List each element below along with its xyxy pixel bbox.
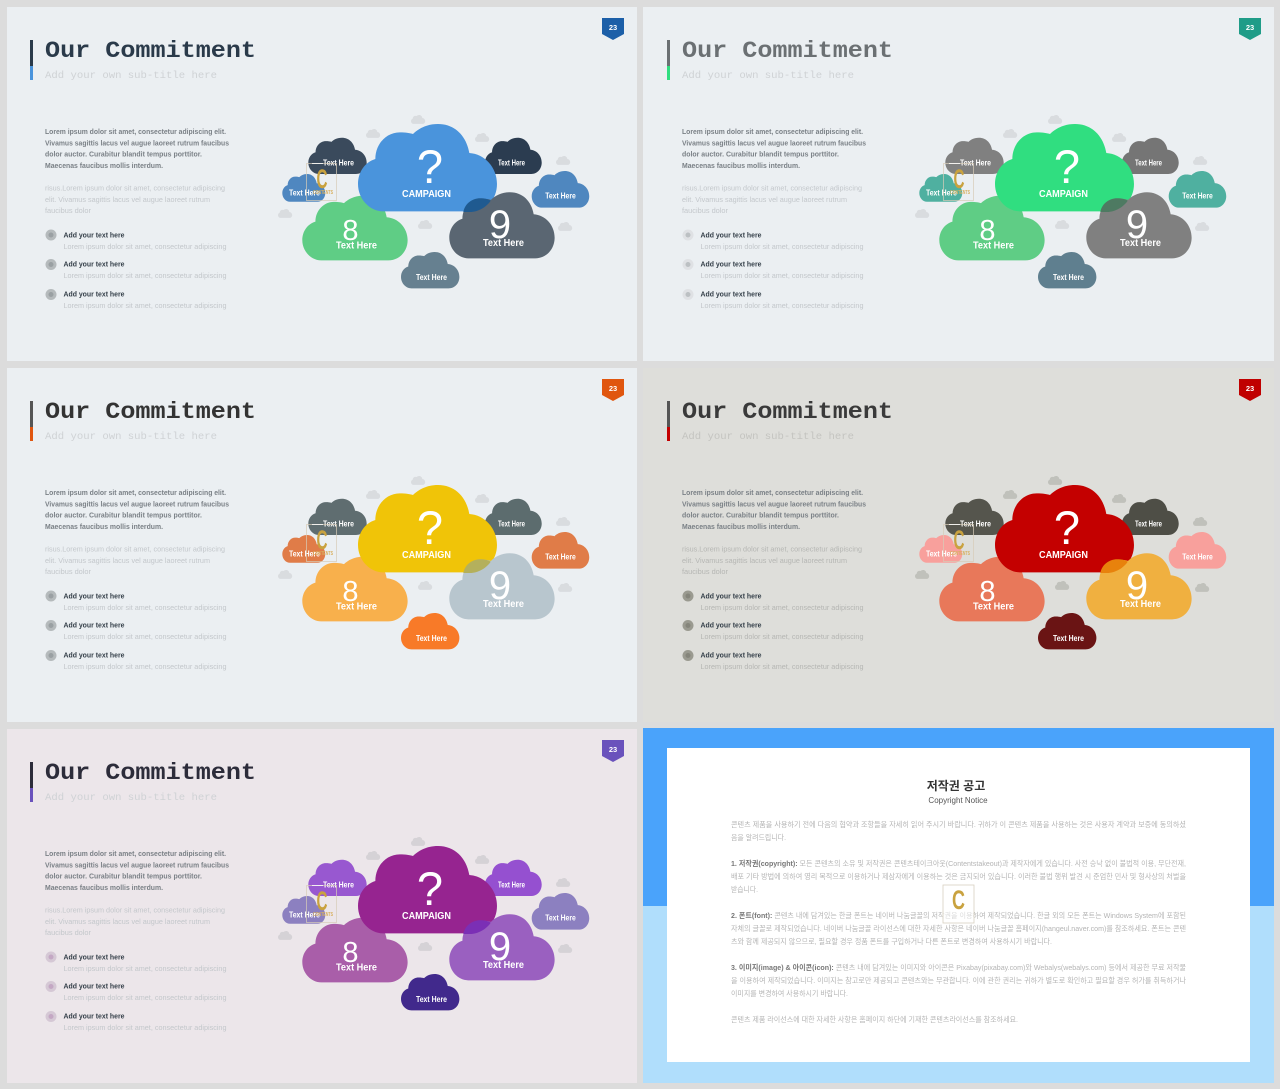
cloud: 9: 9 (489, 203, 511, 247)
bold paragraph: Vivamus sagittis lacus vel augue laoreet rutrum faucibus (45, 499, 229, 508)
cloud: left small: Text Here (926, 550, 957, 559)
cloud: 8 (302, 196, 408, 260)
bullet list: Lorem ipsum dolor sit amet, consectetur adipiscing (700, 301, 864, 310)
bullet list: Add your text here (64, 620, 124, 630)
cloud: 9 (1086, 192, 1192, 258)
cloud: left small: Text Here (926, 189, 957, 198)
watermark: CONTENTS (313, 190, 333, 196)
bullet list: Add your text here (700, 260, 762, 268)
subtitle: Add your own sub-title here (682, 70, 854, 82)
watermark: C (954, 164, 964, 194)
cloud diagram (278, 837, 589, 1010)
title: Our Commitment (45, 760, 256, 786)
subtitle: Add your own sub-title here (45, 431, 217, 443)
cloud diagram (915, 115, 1226, 288)
bullet list (46, 590, 226, 671)
bold paragraph: dolor auctor. Curabitur blandit tempus porttitor. (45, 872, 202, 881)
bold paragraph (682, 127, 866, 170)
cloud: top left (308, 138, 367, 174)
bullet list: Lorem ipsum dolor sit amet, consectetur adipiscing (700, 242, 864, 251)
cloud: top right: Text Here (498, 159, 525, 168)
bold paragraph: Maecenas faucibus mollis interdum. (682, 161, 800, 170)
cloud: bottom (1038, 613, 1096, 649)
watermark (306, 524, 336, 562)
bullet list: Add your text here (700, 290, 762, 298)
cloud: right (532, 893, 589, 930)
cloud diagram (278, 476, 589, 649)
bold paragraph: dolor auctor. Curabitur blandit tempus porttitor. (682, 150, 839, 159)
cloud: 8 (939, 557, 1045, 621)
cloud: campaign: CAMPAIGN (402, 911, 451, 922)
bold paragraph: Lorem ipsum dolor sit amet, consectetur adipiscing elit. (45, 849, 226, 858)
cloud: left small: Text Here (289, 911, 320, 920)
cloud: campaign (995, 485, 1134, 572)
cloud: bottom (1038, 252, 1096, 288)
page badge (602, 740, 624, 762)
cloud: campaign: ? (417, 862, 443, 915)
cloud: bottom: Text Here (416, 634, 447, 643)
cloud: bottom (401, 613, 459, 649)
bold paragraph: Maecenas faucibus mollis interdum. (45, 522, 163, 531)
cloud: 8: 8 (342, 937, 359, 969)
watermark: CONTENTS (313, 912, 333, 918)
cloud: campaign (358, 846, 497, 933)
cloud: bottom: Text Here (1053, 634, 1084, 643)
cloud: campaign (358, 485, 497, 572)
cloud: top right: Text Here (1135, 520, 1162, 529)
cloud: right: Text Here (545, 914, 576, 923)
cloud: top left: Text Here (960, 159, 991, 168)
notice section 3 (731, 962, 1186, 998)
gray paragraph (45, 906, 225, 937)
watermark: C (316, 525, 328, 555)
cloud: right (532, 532, 589, 569)
bold paragraph: Maecenas faucibus mollis interdum. (682, 522, 800, 531)
bullet list: Add your text here (700, 230, 762, 240)
bold paragraph: Lorem ipsum dolor sit amet, consectetur adipiscing elit. (682, 488, 863, 497)
notice section 1 (731, 858, 1186, 894)
bullet list: Lorem ipsum dolor sit amet, consectetur adipiscing (700, 603, 864, 612)
cloud: 9: Text Here (483, 237, 524, 249)
page badge: 23 (609, 745, 617, 754)
watermark: CONTENTS (950, 551, 970, 557)
notice section 2: 자체의 글꼴로 제작되었습니다. 네이버 나눔글꼴 라이선스에 대한 자세한 사항은 네이버 나눔글꼴 홈페이지(hangeul.naver.com)를 참조하세요. 폰트는 콘텐 (731, 923, 1186, 933)
notice section 3: 이미지를 변경하여 사용하시기 바랍니다. (731, 988, 848, 998)
cloud: left small (919, 174, 962, 202)
notice closing line: 콘텐츠 제품 라이선스에 대한 자세한 사항은 홈페이지 하단에 기재한 콘텐츠라이선스를 참조하세요. (731, 1014, 1018, 1024)
notice section 1: 1. 저작권(copyright): 모든 콘텐츠의 소유 및 저작권은 콘텐츠테이크아웃(Contentstakeout)과 제작자에게 있습니다. 사전 승낙 없이 불법적 이용, 무단전재, (731, 858, 1186, 868)
bold paragraph: dolor auctor. Curabitur blandit tempus porttitor. (45, 511, 202, 520)
cloud: 8: Text Here (336, 240, 377, 252)
gray paragraph (45, 544, 225, 576)
cloud: 9 (449, 192, 555, 258)
gray paragraph: risus.Lorem ipsum dolor sit amet, consectetur adipiscing (45, 544, 225, 554)
cloud: top right (1122, 499, 1179, 535)
page badge (1239, 18, 1261, 40)
gray paragraph: elit. Vivamus sagittis lacus vel augue laoreet rutrum (45, 195, 210, 204)
page badge: 23 (1246, 384, 1254, 393)
notice section 3: 3. 이미지(image) & 아이콘(icon): 콘텐츠 내에 담겨있는 이미지와 아이콘은 Pixabay(pixabay.com)와 Webalys(webalys.com) 등에서 제공한 무료 저작물 (731, 962, 1186, 972)
gray paragraph: elit. Vivamus sagittis lacus vel augue laoreet rutrum (682, 556, 847, 565)
cloud: top left: Text Here (960, 520, 991, 529)
gray paragraph: faucibus dolor (682, 567, 729, 576)
cloud: top right (1122, 138, 1179, 174)
bullet list: Lorem ipsum dolor sit amet, consectetur adipiscing (700, 662, 864, 671)
gray paragraph: faucibus dolor (45, 206, 92, 215)
watermark: CONTENTS (313, 551, 333, 557)
cloud: left small (919, 535, 962, 563)
title: Our Commitment (45, 38, 256, 64)
bullet list: Lorem ipsum dolor sit amet, consectetur adipiscing (64, 964, 226, 973)
gray paragraph: risus.Lorem ipsum dolor sit amet, consectetur adipiscing (45, 184, 225, 192)
cloud: 8 (302, 557, 408, 621)
cloud: 9: 9 (1126, 203, 1148, 247)
gray paragraph (682, 544, 862, 576)
subtitle: Add your own sub-title here (45, 70, 217, 82)
cloud: right: Text Here (545, 553, 576, 562)
bullet list: Add your text here (700, 592, 762, 600)
title accent bar (30, 762, 33, 802)
title accent bar (667, 401, 670, 441)
cloud: bottom: Text Here (416, 995, 447, 1004)
bullet list: Lorem ipsum dolor sit amet, consectetur adipiscing (64, 603, 226, 612)
cloud: campaign (995, 124, 1134, 211)
gray paragraph: risus.Lorem ipsum dolor sit amet, consectetur adipiscing (682, 544, 862, 554)
cloud: bottom: Text Here (1053, 273, 1084, 282)
cloud: top left: Text Here (323, 520, 354, 529)
cloud: campaign: CAMPAIGN (402, 189, 451, 200)
watermark: C (952, 885, 965, 915)
watermark (944, 524, 974, 562)
notice subtitle: Copyright Notice (928, 796, 988, 805)
cloud: top right: Text Here (498, 881, 525, 890)
cloud diagram (915, 476, 1226, 649)
cloud: top right (485, 499, 542, 535)
cloud: top left: Text Here (323, 881, 354, 890)
watermark (306, 164, 336, 200)
cloud: top right: Text Here (498, 520, 525, 529)
bullet list (46, 952, 226, 1032)
bullet list: Add your text here (64, 592, 124, 600)
bullet list: Lorem ipsum dolor sit amet, consectetur adipiscing (64, 632, 226, 641)
page badge (602, 379, 624, 401)
cloud: 8: 8 (342, 576, 359, 608)
cloud: 9: Text Here (1120, 598, 1161, 610)
panel: green theme (643, 7, 1274, 361)
cloud: left small: Text Here (289, 189, 320, 198)
watermark (943, 885, 974, 923)
cloud: 9: Text Here (483, 959, 524, 971)
cloud: 9 (1086, 553, 1192, 619)
gray paragraph: elit. Vivamus sagittis lacus vel augue laoreet rutrum (45, 917, 210, 926)
watermark: C (954, 525, 964, 555)
cloud: campaign: ? (417, 140, 443, 193)
bullet list: Add your text here (64, 982, 124, 990)
cloud: right (1169, 171, 1226, 208)
cloud: top left (945, 499, 1004, 535)
bold paragraph: Maecenas faucibus mollis interdum. (45, 161, 163, 170)
bullet list: Add your text here (700, 620, 762, 630)
cloud: campaign: CAMPAIGN (1039, 550, 1088, 561)
cloud: 8: 8 (979, 576, 996, 608)
cloud: 8: Text Here (973, 240, 1014, 252)
watermark (944, 164, 974, 200)
cloud: right: Text Here (1182, 553, 1213, 562)
panel: red theme (643, 368, 1274, 722)
cloud: 9: 9 (489, 925, 511, 969)
cloud: bottom (401, 252, 459, 288)
cloud: 9: Text Here (1120, 237, 1161, 249)
bold paragraph: Vivamus sagittis lacus vel augue laoreet rutrum faucibus (682, 499, 866, 508)
cloud: 8 (302, 918, 408, 982)
panel: copyright notice (643, 728, 1274, 1083)
cloud: 9 (449, 553, 555, 619)
cloud: bottom: Text Here (416, 273, 447, 282)
subtitle: Add your own sub-title here (45, 792, 217, 804)
bold paragraph: Vivamus sagittis lacus vel augue laoreet rutrum faucibus (682, 138, 866, 147)
cloud: top left (308, 499, 367, 535)
title: Our Commitment (682, 399, 893, 425)
bold paragraph (682, 488, 866, 531)
cloud: bottom (401, 974, 459, 1010)
bullet list: Add your text here (64, 290, 124, 298)
bullet list: Lorem ipsum dolor sit amet, consectetur adipiscing (64, 1023, 226, 1032)
bullet list: Lorem ipsum dolor sit amet, consectetur adipiscing (700, 271, 864, 280)
bold paragraph: Lorem ipsum dolor sit amet, consectetur adipiscing elit. (45, 127, 226, 136)
gray paragraph: faucibus dolor (45, 928, 92, 937)
gray paragraph (682, 184, 862, 215)
notice section 3: 을 이용하여 제작되었습니다. 이미지는 참고로만 제공되고 콘텐츠와는 무관합니다. 이에 관한 권리는 귀하가 별도로 확인하고 필요할 경우 허가를 취득하거나 (731, 975, 1186, 985)
bullet list: Lorem ipsum dolor sit amet, consectetur adipiscing (64, 242, 226, 251)
gray paragraph: risus.Lorem ipsum dolor sit amet, consectetur adipiscing (682, 184, 862, 192)
cloud: top left (945, 138, 1004, 174)
notice intro: 음을 알려드립니다. (731, 832, 786, 842)
panel: purple theme (7, 729, 637, 1083)
bold paragraph (45, 488, 229, 531)
notice section 2: 츠와 함께 제공되지 않으므로, 필요할 경우 정품 폰트를 구입하거나 다른 폰트로 변경하여 사용하시기 바랍니다. (731, 936, 1052, 946)
cloud: left small (282, 896, 325, 924)
cloud: top right (485, 860, 542, 896)
bullet list: Add your text here (64, 952, 124, 962)
title accent bar (667, 40, 670, 80)
gray paragraph: elit. Vivamus sagittis lacus vel augue laoreet rutrum (682, 195, 847, 204)
cloud: right: Text Here (1182, 192, 1213, 201)
cloud: 8: Text Here (336, 601, 377, 613)
bullet list: Lorem ipsum dolor sit amet, consectetur adipiscing (64, 301, 226, 310)
cloud: campaign: ? (1054, 501, 1080, 554)
title accent bar (30, 40, 33, 80)
gray paragraph: elit. Vivamus sagittis lacus vel augue laoreet rutrum (45, 556, 210, 565)
notice section 1: 배포 기타 방법에 의하여 영리 목적으로 이용하거나 제삼자에게 이용하는 것은 금지되어 있습니다. 이러한 불법 행위 발견 시 준엄한 민사 및 형사상의 처벌을 (731, 871, 1186, 881)
bold paragraph: Lorem ipsum dolor sit amet, consectetur adipiscing elit. (45, 488, 226, 497)
bullet list: Add your text here (64, 650, 124, 660)
gray paragraph: risus.Lorem ipsum dolor sit amet, consectetur adipiscing (45, 906, 225, 914)
cloud: 8: Text Here (336, 962, 377, 974)
cloud: left small (282, 174, 325, 202)
panel: blue theme (7, 7, 637, 361)
title: Our Commitment (45, 399, 256, 425)
cloud: right (532, 171, 589, 208)
cloud: left small (282, 535, 325, 563)
title: Our Commitment (682, 38, 893, 64)
bullet list: Add your text here (700, 650, 762, 660)
title accent bar (30, 401, 33, 441)
bullet list: Add your text here (64, 230, 124, 240)
page badge (1239, 379, 1261, 401)
bold paragraph: Maecenas faucibus mollis interdum. (45, 883, 163, 892)
cloud: 9 (449, 914, 555, 980)
bold paragraph (45, 127, 229, 170)
bullet list: Add your text here (64, 1012, 124, 1020)
page badge: 23 (609, 23, 617, 32)
notice section 2: 2. 폰트(font): 콘텐츠 내에 담겨있는 한글 폰트는 네이버 나눔글꼴의 저작권을 이용하여 제작되었습니다. 한글 외의 모든 폰트는 Windows System에 포함된 (731, 910, 1186, 920)
bold paragraph: dolor auctor. Curabitur blandit tempus porttitor. (45, 150, 202, 159)
notice title: 저작권 공고 (927, 778, 985, 793)
cloud: campaign (358, 124, 497, 211)
bullet list (682, 230, 864, 310)
cloud: 9: Text Here (483, 598, 524, 610)
cloud: left small: Text Here (289, 550, 320, 559)
cloud: campaign: ? (417, 501, 443, 554)
cloud: top right: Text Here (1135, 159, 1162, 168)
cloud: 8: 8 (342, 215, 359, 247)
cloud: 8 (939, 196, 1045, 260)
cloud: 8: Text Here (973, 601, 1014, 613)
cloud: top right (485, 138, 542, 174)
bullet list: Lorem ipsum dolor sit amet, consectetur adipiscing (64, 993, 226, 1002)
cloud diagram (278, 115, 589, 288)
cloud: campaign: CAMPAIGN (402, 550, 451, 561)
cloud: 8: 8 (979, 215, 996, 247)
bullet list: Lorem ipsum dolor sit amet, consectetur adipiscing (64, 271, 226, 280)
bold paragraph: Lorem ipsum dolor sit amet, consectetur adipiscing elit. (682, 127, 863, 136)
cloud: right (1169, 532, 1226, 569)
cloud: campaign: ? (1054, 140, 1080, 193)
notice intro (731, 819, 1186, 842)
gray paragraph: faucibus dolor (682, 206, 729, 215)
bullet list: Lorem ipsum dolor sit amet, consectetur adipiscing (64, 662, 226, 671)
notice intro: 콘텐츠 제품을 사용하기 전에 다음의 협약과 조항들을 자세히 읽어 주시기 바랍니다. 귀하가 이 콘텐츠 제품을 사용하는 것은 사용자 계약과 보증에 동의하셨 (731, 819, 1186, 829)
cloud: 9: 9 (1126, 564, 1148, 608)
cloud: right: Text Here (545, 192, 576, 201)
bullet list: Add your text here (64, 260, 124, 268)
page badge: 23 (609, 384, 617, 393)
gray paragraph (45, 184, 225, 215)
subtitle: Add your own sub-title here (682, 431, 854, 443)
notice section 1: 받습니다. (731, 884, 758, 894)
watermark: C (316, 164, 328, 194)
notice section 2 (731, 910, 1186, 946)
page badge (602, 18, 624, 40)
bullet list (682, 590, 864, 671)
watermark: C (316, 886, 328, 916)
watermark: CONTENTS (950, 190, 970, 196)
bold paragraph (45, 849, 229, 892)
cloud: top left (308, 860, 367, 896)
cloud: campaign: CAMPAIGN (1039, 189, 1088, 200)
panel: orange theme (7, 368, 637, 722)
bullet list: Lorem ipsum dolor sit amet, consectetur adipiscing (700, 632, 864, 641)
cloud: 9: 9 (489, 564, 511, 608)
bold paragraph: Vivamus sagittis lacus vel augue laoreet rutrum faucibus (45, 860, 229, 869)
bold paragraph: dolor auctor. Curabitur blandit tempus porttitor. (682, 511, 839, 520)
bullet list (46, 230, 226, 310)
bold paragraph: Vivamus sagittis lacus vel augue laoreet rutrum faucibus (45, 138, 229, 147)
gray paragraph: faucibus dolor (45, 567, 92, 576)
cloud: top left: Text Here (323, 159, 354, 168)
watermark (306, 886, 336, 922)
page badge: 23 (1246, 23, 1254, 32)
